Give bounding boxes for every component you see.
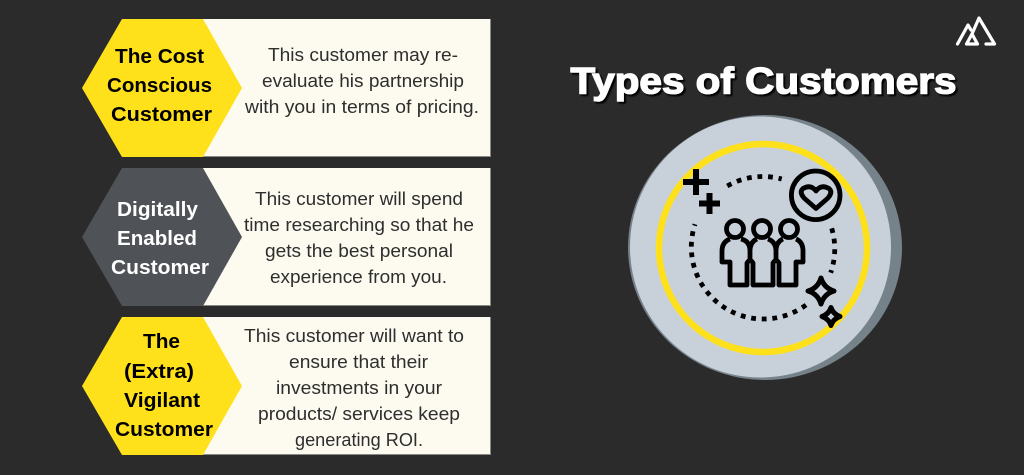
description card 2: gets the best personal [265,240,453,261]
hexagon label 1: The Cost [115,45,204,68]
description card 1: evaluate his partnership [262,70,464,91]
icon: three people [722,220,803,285]
badge disc [628,115,902,380]
hexagon label 1: Conscious [107,74,212,97]
hexagon label 2 [82,168,242,306]
description card 3: generating ROI. [295,429,423,450]
description card 3: investments in your [276,377,442,398]
hexagon label 3: (Extra) [124,360,194,383]
icon: plus signs [683,169,720,214]
hexagon label 3: Vigilant [124,389,200,412]
description card 2: This customer will spend [255,188,463,209]
yellow ring [659,144,867,352]
hexagon label 3 [82,317,242,455]
panel: digitally enabled customer [82,168,491,306]
icon: sparkles [808,278,840,326]
description card 1: with you in terms of pricing. [244,96,479,117]
panel: extra vigilant customer [82,317,491,455]
description card 2: experience from you. [270,266,447,287]
illustration: customers badge [628,115,902,380]
hexagon label 1 [82,19,242,157]
hexagon label 3: Customer [115,418,213,441]
hexagon label 2: Customer [111,256,209,279]
hexagon label 2: Enabled [117,227,197,250]
description card 1 [122,19,491,157]
description card 3: products/ services keep [258,403,460,424]
description card 3 [122,317,491,455]
hexagon label 2: Digitally [117,198,199,221]
hexagon label 3: The [143,330,180,353]
panel: cost conscious customer [82,19,491,157]
description card 3: This customer will want to [244,325,464,346]
description card 1: This customer may re- [268,44,458,65]
hexagon label 1: Customer [111,103,212,126]
icon: logo [958,18,994,44]
description card 3: ensure that their [289,351,428,372]
icon: heart in circle [791,171,840,220]
description card 2 [122,168,491,306]
title: Types of Customers [570,60,956,102]
description card 2: time researching so that he [244,214,474,235]
dotted orbit [691,177,835,319]
